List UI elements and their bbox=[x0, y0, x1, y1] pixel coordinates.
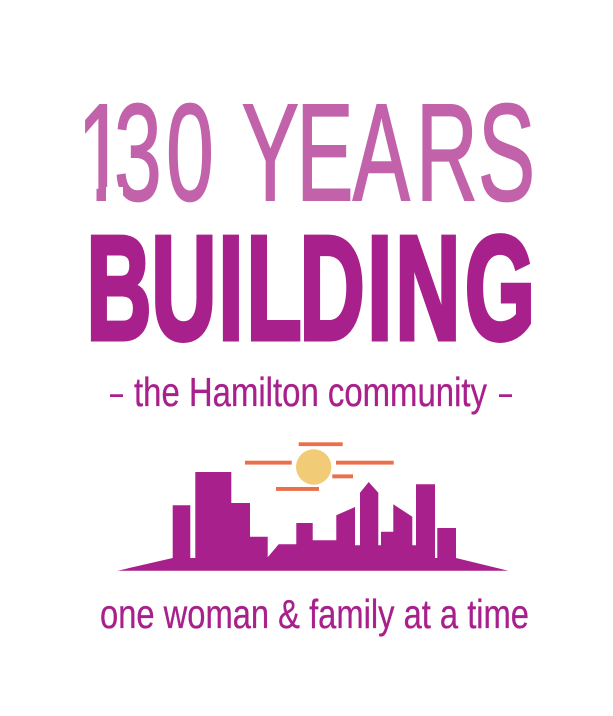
infographic logo bbox=[85, 102, 532, 637]
cloud lines bbox=[245, 442, 394, 491]
icon: sun bbox=[296, 449, 331, 485]
heading: building: BUILDING bbox=[86, 205, 535, 370]
subheading: the Hamilton community: the Hamilton community bbox=[134, 369, 487, 415]
heading: 130 years: 130 YEARS bbox=[78, 76, 535, 230]
icon: city skyline bbox=[118, 472, 508, 571]
subheading: the Hamilton community: – bbox=[499, 369, 512, 415]
subheading: the Hamilton community: – bbox=[110, 369, 123, 415]
icon: sun with orange cloud lines bbox=[245, 442, 394, 491]
